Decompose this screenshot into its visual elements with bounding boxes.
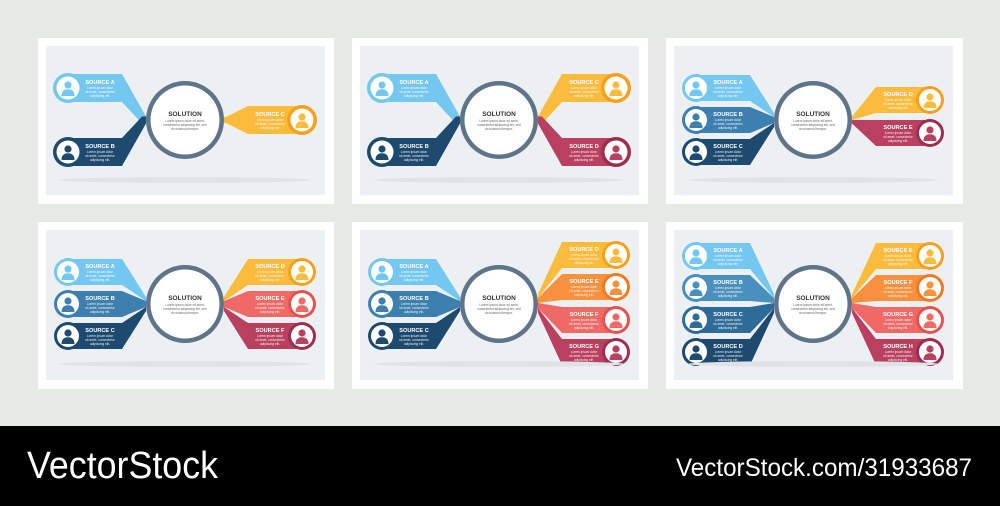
source G: SOURCE G [883, 312, 913, 318]
source A: Lorem ipsum dolor [401, 270, 428, 274]
source D: adipiscing elit. [718, 358, 738, 362]
source F: SOURCE F [884, 280, 913, 286]
source A: sit amet, consectetur [713, 90, 744, 94]
source B [682, 106, 774, 134]
source C: SOURCE C [569, 80, 599, 86]
source C: sit amet, consectetur [713, 322, 744, 326]
source B [367, 116, 460, 167]
source D: Lorem ipsum dolor [885, 98, 912, 102]
source E [852, 242, 944, 298]
source A [368, 258, 460, 301]
source A: adipiscing elit. [404, 278, 424, 282]
solution circle [60, 81, 310, 183]
source C: SOURCE C [255, 112, 285, 118]
source D [852, 86, 944, 120]
source D: adipiscing elit. [260, 278, 280, 282]
source E: Lorem ipsum dolor [571, 285, 598, 289]
panel: 3 sources to 3 [38, 222, 334, 389]
source A: Lorem ipsum dolor [401, 86, 428, 90]
source D: Lorem ipsum dolor [715, 350, 742, 354]
source C [54, 307, 146, 350]
source C: sit amet, consectetur [85, 338, 116, 342]
source B [53, 116, 146, 167]
panel: 2 sources to 1 [38, 38, 334, 204]
source C [682, 123, 774, 166]
source D [538, 241, 630, 298]
source F: SOURCE F [256, 328, 285, 334]
source B: SOURCE B [713, 112, 743, 118]
source F [852, 274, 944, 303]
source E: Lorem ipsum dolor [885, 254, 912, 258]
source F: adipiscing elit. [260, 342, 280, 346]
panel: 3 sources to 2 [666, 38, 963, 204]
source A: SOURCE A [85, 264, 115, 270]
source D: SOURCE D [569, 247, 599, 253]
source D: sit amet, consectetur [713, 354, 744, 358]
source E: adipiscing elit. [888, 262, 908, 266]
footer bar [0, 426, 1000, 506]
source G: Lorem ipsum dolor [571, 350, 598, 354]
source E: sit amet, consectetur [883, 135, 914, 139]
source E: adipiscing elit. [574, 293, 594, 297]
source A: SOURCE A [85, 80, 115, 86]
source E [538, 273, 630, 303]
source A: sit amet, consectetur [399, 274, 430, 278]
source A: adipiscing elit. [718, 94, 738, 98]
source B: sit amet, consectetur [85, 306, 116, 310]
source D: adipiscing elit. [888, 106, 908, 110]
source D: Lorem ipsum dolor [571, 150, 598, 154]
source C [224, 105, 317, 135]
source A: sit amet, consectetur [85, 274, 116, 278]
source B: Lorem ipsum dolor [87, 150, 114, 154]
source D: SOURCE D [883, 92, 913, 98]
source A: Lorem ipsum dolor [715, 86, 742, 90]
source F [538, 303, 630, 334]
source F: adipiscing elit. [888, 294, 908, 298]
source B: adipiscing elit. [718, 294, 738, 298]
solution circle [688, 265, 938, 367]
source C: sit amet, consectetur [255, 122, 286, 126]
source G: sit amet, consectetur [569, 354, 600, 358]
source C: Lorem ipsum dolor [571, 86, 598, 90]
source A: sit amet, consectetur [713, 258, 744, 262]
source E: sit amet, consectetur [255, 306, 286, 310]
source C: Lorem ipsum dolor [87, 334, 114, 338]
source D: SOURCE D [255, 264, 285, 270]
source F: Lorem ipsum dolor [257, 334, 284, 338]
source D: adipiscing elit. [574, 158, 594, 162]
source A: adipiscing elit. [718, 262, 738, 266]
source H: SOURCE H [883, 344, 913, 350]
source H: adipiscing elit. [888, 358, 908, 362]
source A: adipiscing elit. [90, 94, 110, 98]
source B: Lorem ipsum dolor [401, 150, 428, 154]
source G: SOURCE G [569, 344, 599, 350]
source E: adipiscing elit. [260, 310, 280, 314]
source C: adipiscing elit. [90, 342, 110, 346]
source G: adipiscing elit. [888, 326, 908, 330]
source E: SOURCE E [569, 279, 599, 285]
source D: sit amet, consectetur [569, 257, 600, 261]
source A: SOURCE A [399, 80, 429, 86]
source E: SOURCE E [255, 296, 285, 302]
source D [224, 258, 316, 301]
source H: Lorem ipsum dolor [885, 350, 912, 354]
source A: sit amet, consectetur [85, 90, 116, 94]
source C: sit amet, consectetur [569, 90, 600, 94]
source F: Lorem ipsum dolor [571, 318, 598, 322]
source A: adipiscing elit. [90, 278, 110, 282]
source G [852, 303, 944, 334]
source D: Lorem ipsum dolor [571, 253, 598, 257]
source C: adipiscing elit. [404, 342, 424, 346]
source B: sit amet, consectetur [399, 306, 430, 310]
source D: SOURCE D [713, 344, 743, 350]
source C: adipiscing elit. [574, 94, 594, 98]
footer url: VectorStock.com/31933687 [676, 454, 972, 482]
source C: adipiscing elit. [718, 326, 738, 330]
footer logo: VectorStock [27, 445, 219, 487]
source C: adipiscing elit. [260, 126, 280, 130]
source D [682, 308, 774, 366]
solution circle [60, 265, 310, 367]
solution circle [374, 81, 624, 183]
source C: Lorem ipsum dolor [715, 318, 742, 322]
source F: sit amet, consectetur [255, 338, 286, 342]
source H: sit amet, consectetur [883, 354, 914, 358]
source C [538, 73, 631, 124]
source A: SOURCE A [713, 248, 743, 254]
source B [54, 290, 146, 318]
source B: Lorem ipsum dolor [715, 286, 742, 290]
source C: Lorem ipsum dolor [257, 118, 284, 122]
source E: Lorem ipsum dolor [257, 302, 284, 306]
source E: Lorem ipsum dolor [885, 131, 912, 135]
source A [682, 242, 774, 298]
panel: 3 sources to 4 [352, 222, 648, 389]
source B: adipiscing elit. [404, 310, 424, 314]
source B: sit amet, consectetur [85, 154, 116, 158]
panel: 2 sources to 2 [352, 38, 648, 204]
source E: SOURCE E [883, 125, 913, 131]
source B: sit amet, consectetur [713, 290, 744, 294]
source A: adipiscing elit. [404, 94, 424, 98]
source C: SOURCE C [713, 312, 743, 318]
source B: adipiscing elit. [90, 158, 110, 162]
source B: SOURCE B [713, 280, 743, 286]
source G: sit amet, consectetur [883, 322, 914, 326]
source C [682, 303, 774, 334]
panel: 4 sources to 4 [666, 222, 963, 389]
source B: SOURCE B [399, 144, 429, 150]
source E: sit amet, consectetur [569, 289, 600, 293]
source D: sit amet, consectetur [255, 274, 286, 278]
source B: SOURCE B [85, 296, 115, 302]
source C: Lorem ipsum dolor [715, 150, 742, 154]
source A: SOURCE A [399, 264, 429, 270]
source F: SOURCE F [570, 312, 599, 318]
source C: SOURCE C [713, 144, 743, 150]
source F: sit amet, consectetur [569, 322, 600, 326]
source D: Lorem ipsum dolor [257, 270, 284, 274]
source B [682, 274, 774, 303]
source C: SOURCE C [85, 328, 115, 334]
source A: Lorem ipsum dolor [715, 254, 742, 258]
source C: sit amet, consectetur [713, 154, 744, 158]
source B: adipiscing elit. [90, 310, 110, 314]
source G: Lorem ipsum dolor [885, 318, 912, 322]
solution circle [374, 265, 624, 367]
source E: adipiscing elit. [888, 139, 908, 143]
source D: sit amet, consectetur [883, 102, 914, 106]
source D: SOURCE D [569, 144, 599, 150]
source D [538, 116, 631, 167]
source E [224, 290, 316, 318]
source B: adipiscing elit. [718, 126, 738, 130]
source B [368, 290, 460, 318]
source C: SOURCE C [399, 328, 429, 334]
source C [368, 307, 460, 350]
source D: adipiscing elit. [574, 261, 594, 265]
source A [682, 74, 774, 117]
source D: sit amet, consectetur [569, 154, 600, 158]
source F: adipiscing elit. [574, 326, 594, 330]
source E [852, 119, 944, 147]
source B: adipiscing elit. [404, 158, 424, 162]
source A [367, 73, 460, 124]
source B: sit amet, consectetur [713, 122, 744, 126]
source C: adipiscing elit. [718, 158, 738, 162]
source F [224, 307, 316, 350]
source G [538, 308, 630, 366]
source H [852, 308, 944, 366]
source B: Lorem ipsum dolor [715, 118, 742, 122]
source A: Lorem ipsum dolor [87, 270, 114, 274]
source B: sit amet, consectetur [399, 154, 430, 158]
source F: Lorem ipsum dolor [885, 286, 912, 290]
source B: Lorem ipsum dolor [401, 302, 428, 306]
source B: SOURCE B [85, 144, 115, 150]
source A: Lorem ipsum dolor [87, 86, 114, 90]
source E: SOURCE E [883, 248, 913, 254]
source G: adipiscing elit. [574, 358, 594, 362]
source B: SOURCE B [399, 296, 429, 302]
source C: Lorem ipsum dolor [401, 334, 428, 338]
source B: Lorem ipsum dolor [87, 302, 114, 306]
solution circle [688, 81, 938, 183]
source F: sit amet, consectetur [883, 290, 914, 294]
source C: sit amet, consectetur [399, 338, 430, 342]
source A: sit amet, consectetur [399, 90, 430, 94]
source A [53, 73, 146, 124]
source A: SOURCE A [713, 80, 743, 86]
source E: sit amet, consectetur [883, 258, 914, 262]
source A [54, 258, 146, 301]
